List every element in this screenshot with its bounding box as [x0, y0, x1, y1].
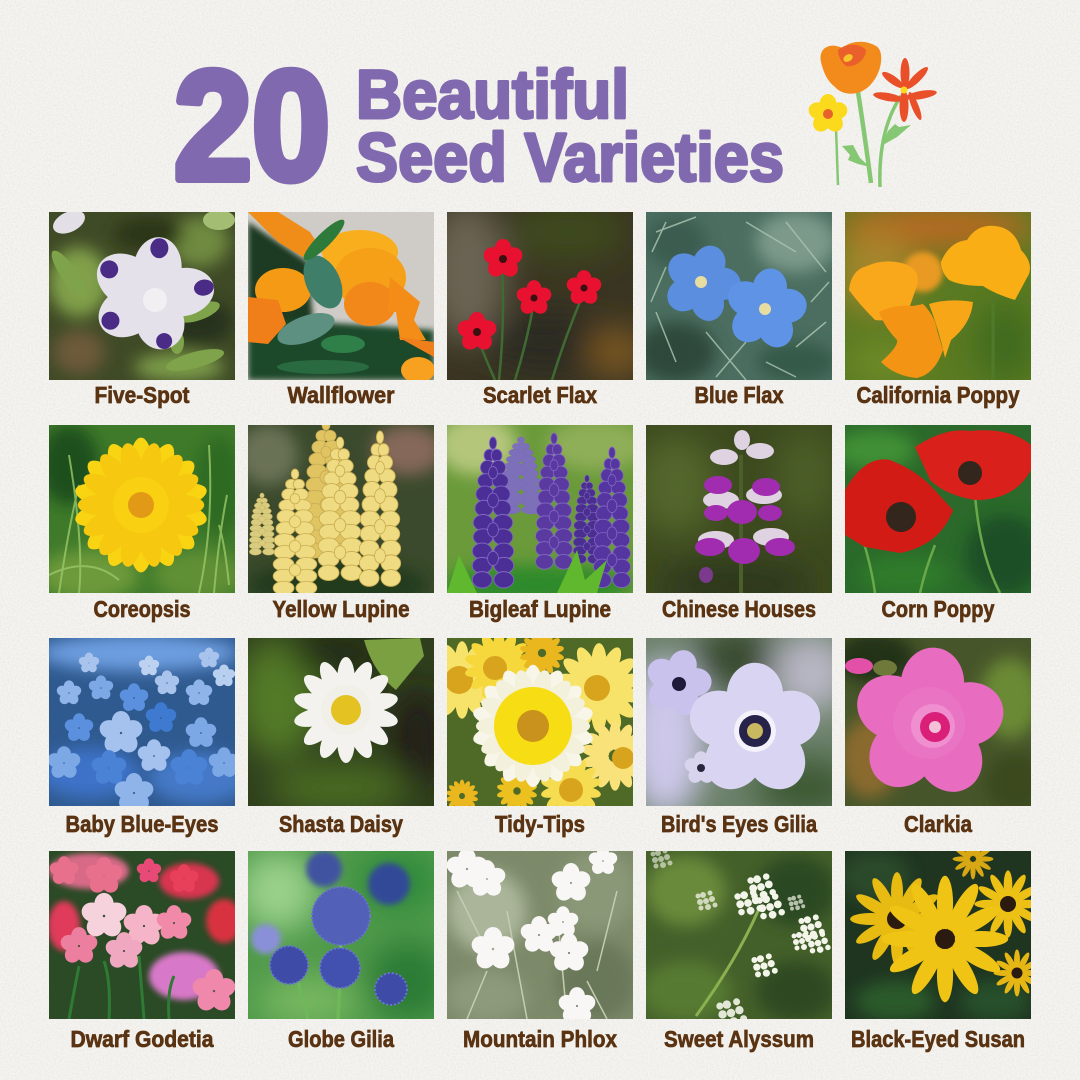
tile: Baby Blue-Eyes [39, 635, 249, 837]
label: Five-Spot [94, 382, 190, 408]
label: Wallflower [288, 382, 395, 408]
photo: blue globe gilia [248, 851, 434, 1019]
photo: orange wallflowers [248, 212, 434, 380]
label: Shasta Daisy [279, 811, 403, 837]
photo: Chinese Houses whorls [646, 425, 832, 593]
tile: Yellow Lupine [238, 419, 443, 622]
big number 20: 20 [174, 39, 330, 212]
photo: purple lupine spikes [447, 425, 633, 593]
heading line 1: Beautiful [356, 56, 629, 133]
tile: Chinese Houses [636, 425, 836, 622]
photo: pink clarkia [845, 638, 1031, 806]
heading line 2: Seed Varieties [356, 119, 784, 196]
label: Bird's Eyes Gilia [661, 811, 817, 837]
photo: blue flax blossoms [646, 212, 832, 380]
tile: California Poppy [835, 202, 1035, 408]
label: Dwarf Godetia [70, 1026, 214, 1052]
tile: Wallflower [248, 212, 435, 408]
photo: yellow and white tidy-tips [447, 638, 633, 806]
tile: Scarlet Flax [427, 202, 647, 408]
tile: Coreopsis [39, 425, 244, 622]
photo: red corn poppies [845, 425, 1031, 593]
photo: white mountain phlox [447, 851, 633, 1019]
tile: Clarkia [835, 633, 1045, 837]
tile: Bigleaf Lupine [437, 415, 647, 622]
label: Tidy-Tips [495, 811, 585, 837]
label: California Poppy [856, 382, 1020, 408]
label: Baby Blue-Eyes [66, 811, 218, 837]
photo: white sweet alyssum [646, 851, 832, 1019]
label: Yellow Lupine [272, 596, 410, 622]
label: Chinese Houses [662, 596, 816, 622]
photo: pale lilac gilia [646, 638, 832, 806]
tile: Mountain Phlox [444, 846, 637, 1052]
tile: Five-Spot [46, 206, 235, 408]
tile: Sweet Alyssum [641, 848, 836, 1052]
label: Corn Poppy [882, 596, 995, 622]
label: Mountain Phlox [463, 1026, 617, 1052]
tile: Globe Gilia [238, 851, 448, 1052]
photo: yellow coreopsis [49, 425, 235, 593]
label: Sweet Alyssum [664, 1026, 814, 1052]
photo: baby blue-eyes carpet [49, 638, 235, 806]
photo: red flax blossoms [447, 212, 633, 380]
tile: Dwarf Godetia [48, 851, 242, 1052]
tile: Bird's Eyes Gilia [626, 628, 856, 837]
photo: pink dwarf godetia [49, 851, 235, 1019]
tile: Tidy-Tips [423, 631, 650, 837]
title: 20 Beautiful Seed Varieties [174, 39, 784, 212]
photo: white Shasta daisy [248, 638, 434, 806]
label: Blue Flax [694, 382, 784, 408]
label: Bigleaf Lupine [469, 596, 611, 622]
tile: Black-Eyed Susan [840, 839, 1042, 1052]
photo: orange poppies [845, 212, 1031, 380]
photo: yellow lupine spikes [248, 425, 434, 593]
tile: Blue Flax [636, 212, 836, 408]
tile: Corn Poppy [835, 425, 1045, 622]
photo: black-eyed susans [845, 851, 1031, 1019]
label: Scarlet Flax [483, 382, 597, 408]
label: Globe Gilia [288, 1026, 394, 1052]
label: Coreopsis [94, 596, 190, 622]
flower: white five-spot petals [87, 235, 219, 354]
label: Clarkia [904, 811, 972, 837]
label: Black-Eyed Susan [851, 1026, 1025, 1052]
photo: Five-Spot flower [49, 212, 235, 380]
tile: Shasta Daisy [238, 633, 444, 837]
icon: illustrated flowers [806, 42, 937, 187]
